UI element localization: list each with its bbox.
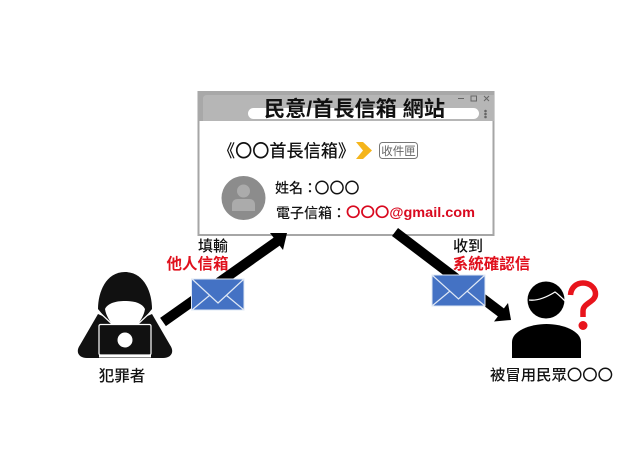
icon: victim bbox=[512, 282, 581, 358]
panel: website window bbox=[198, 91, 494, 235]
email label: 電子信箱： bbox=[276, 205, 346, 221]
inbox button bbox=[380, 142, 418, 158]
arrow: website to victim bbox=[395, 232, 511, 322]
label: fill in: 填輸 bbox=[198, 237, 228, 255]
inbox button: 收件匣 bbox=[381, 144, 416, 158]
icon: question mark bbox=[570, 283, 596, 330]
window controls bbox=[458, 96, 489, 118]
arrow: criminal to website bbox=[163, 233, 287, 322]
icon: envelope right bbox=[432, 275, 485, 306]
icon: hacker bbox=[78, 272, 172, 358]
window heading: 民意/首長信箱 網站 bbox=[264, 97, 445, 121]
icon: yellow chevron bbox=[356, 142, 372, 159]
browser title bar bbox=[198, 91, 494, 121]
name field: 姓名： bbox=[275, 180, 317, 196]
icon: avatar bbox=[222, 176, 266, 220]
label: impersonated citizen: 被冒用民眾〇〇〇 bbox=[490, 367, 613, 384]
name field: 〇〇〇 bbox=[314, 180, 360, 197]
label: system confirmation: 系統確認信 bbox=[453, 254, 530, 273]
label: received: 收到 bbox=[453, 238, 483, 255]
mailbox name: 《〇〇首長信箱》 bbox=[218, 141, 355, 161]
label: other person's email: 他人信箱 bbox=[166, 254, 229, 273]
email value: 〇〇〇@gmail.com bbox=[346, 205, 475, 220]
label: criminal: 犯罪者 bbox=[99, 367, 145, 385]
icon: envelope left bbox=[192, 279, 244, 310]
